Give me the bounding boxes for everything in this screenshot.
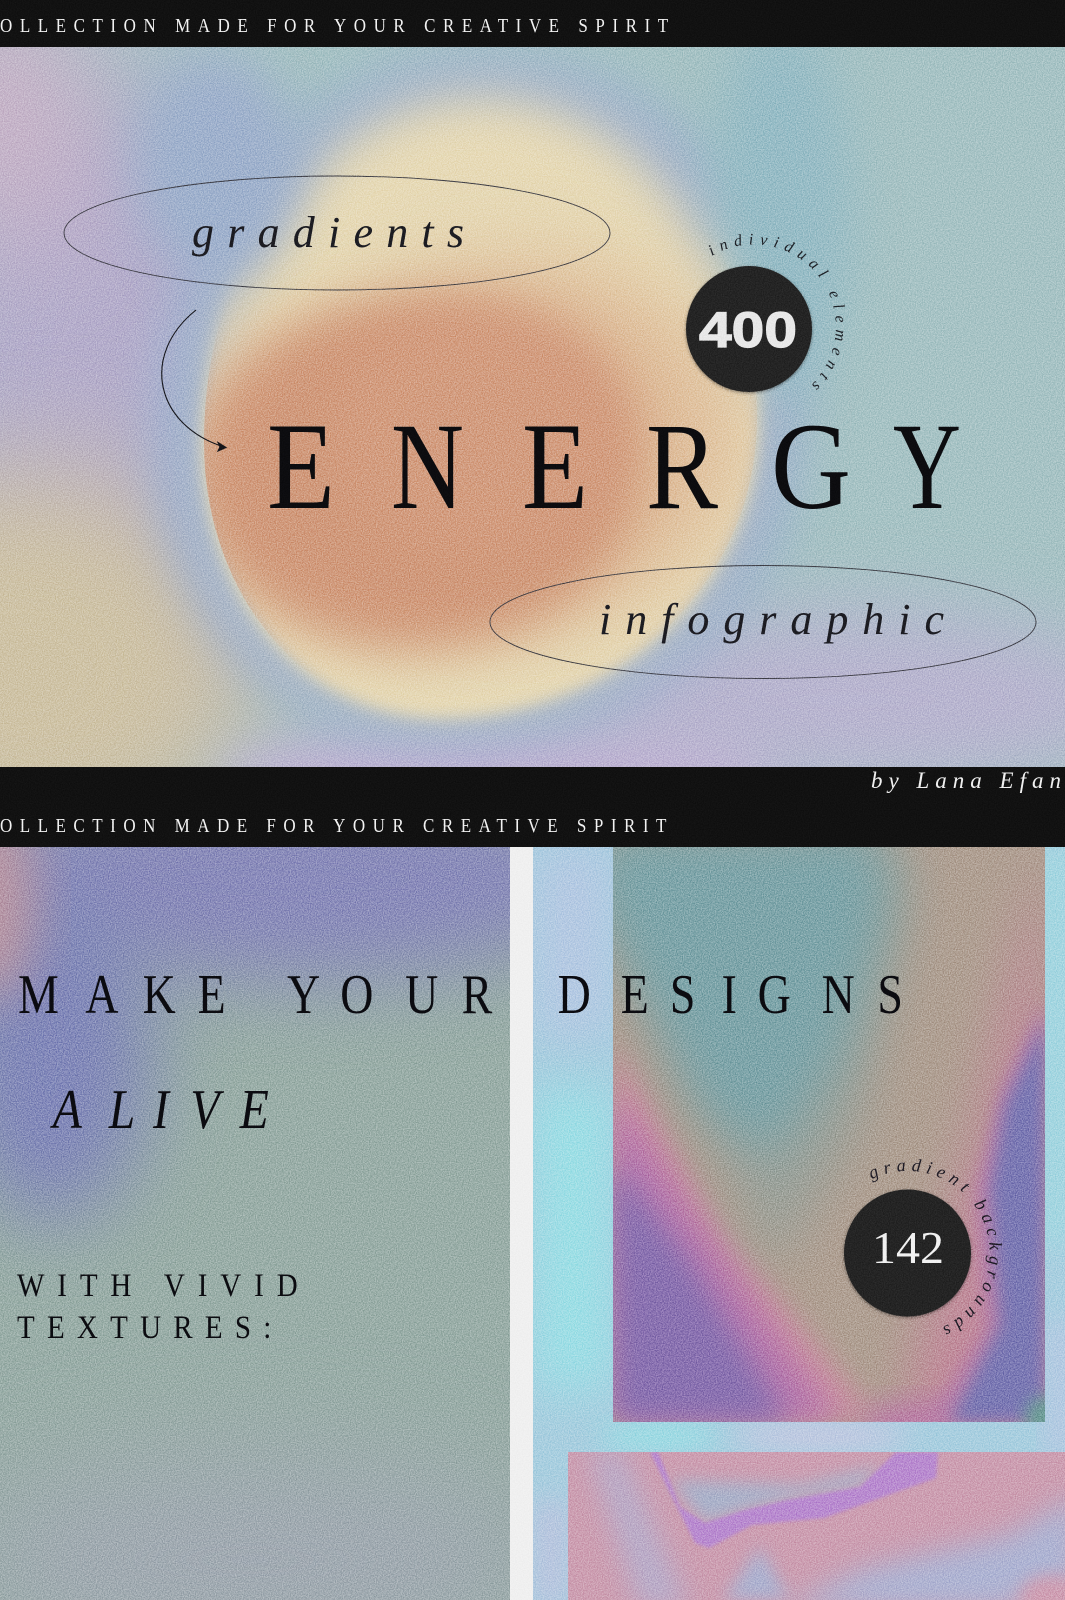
ellipse label: infographic: [490, 566, 1036, 678]
top black strap: [0, 0, 1065, 47]
middle black band: [0, 767, 1065, 847]
purple band: [650, 1452, 938, 1548]
title: ENERGY: E: [522, 398, 588, 535]
ellipse label: gradients: [64, 176, 610, 290]
panel: bottom swatch: [568, 1450, 1065, 1600]
strap text: OLLECTION MADE FOR YOUR CREATIVE SPIRIT: [0, 15, 669, 37]
cream sphere: [204, 85, 757, 717]
badge: 400 individual elements: 400: [699, 302, 797, 358]
title: ENERGY: [270, 426, 959, 509]
ellipse label: infographic: infographic: [599, 595, 944, 644]
white divider strip: [510, 847, 533, 1600]
panel: hero gradient: [0, 47, 1065, 767]
title: ENERGY: G: [771, 398, 851, 535]
text: with vivid textures: [17, 1266, 298, 1345]
poster: gradient background: [613, 847, 1045, 1422]
text: with vivid textures: TEXTURES:: [17, 1308, 271, 1345]
second strap text: OLLECTION MADE FOR YOUR CREATIVE SPIRIT: [0, 815, 667, 837]
heading: ALIVE: ALIVE: [50, 1080, 269, 1141]
badge: 142 gradient backgrounds: gradient backgrounds: [870, 1159, 1002, 1334]
title: ENERGY: Y: [893, 398, 961, 535]
badge: 400 individual elements: individual elements: [708, 234, 845, 390]
heading: MAKE YOUR DESIGNS: MAKE YOUR DESIGNS: [18, 964, 903, 1026]
title: ENERGY: R: [646, 398, 718, 535]
text: with vivid textures: WITH VIVID: [17, 1266, 298, 1303]
badge: 142 gradient backgrounds: 142: [872, 1222, 944, 1273]
title: ENERGY: E: [267, 398, 335, 535]
orange core: [185, 260, 740, 650]
author credit: by Lana Efan: [871, 768, 1061, 793]
ellipse label: gradients: gradients: [192, 208, 464, 257]
arrow: [162, 310, 226, 451]
panel: left gradient: [0, 847, 510, 1600]
panel: right backdrop: [533, 847, 1065, 1600]
title: ENERGY: N: [391, 398, 464, 535]
